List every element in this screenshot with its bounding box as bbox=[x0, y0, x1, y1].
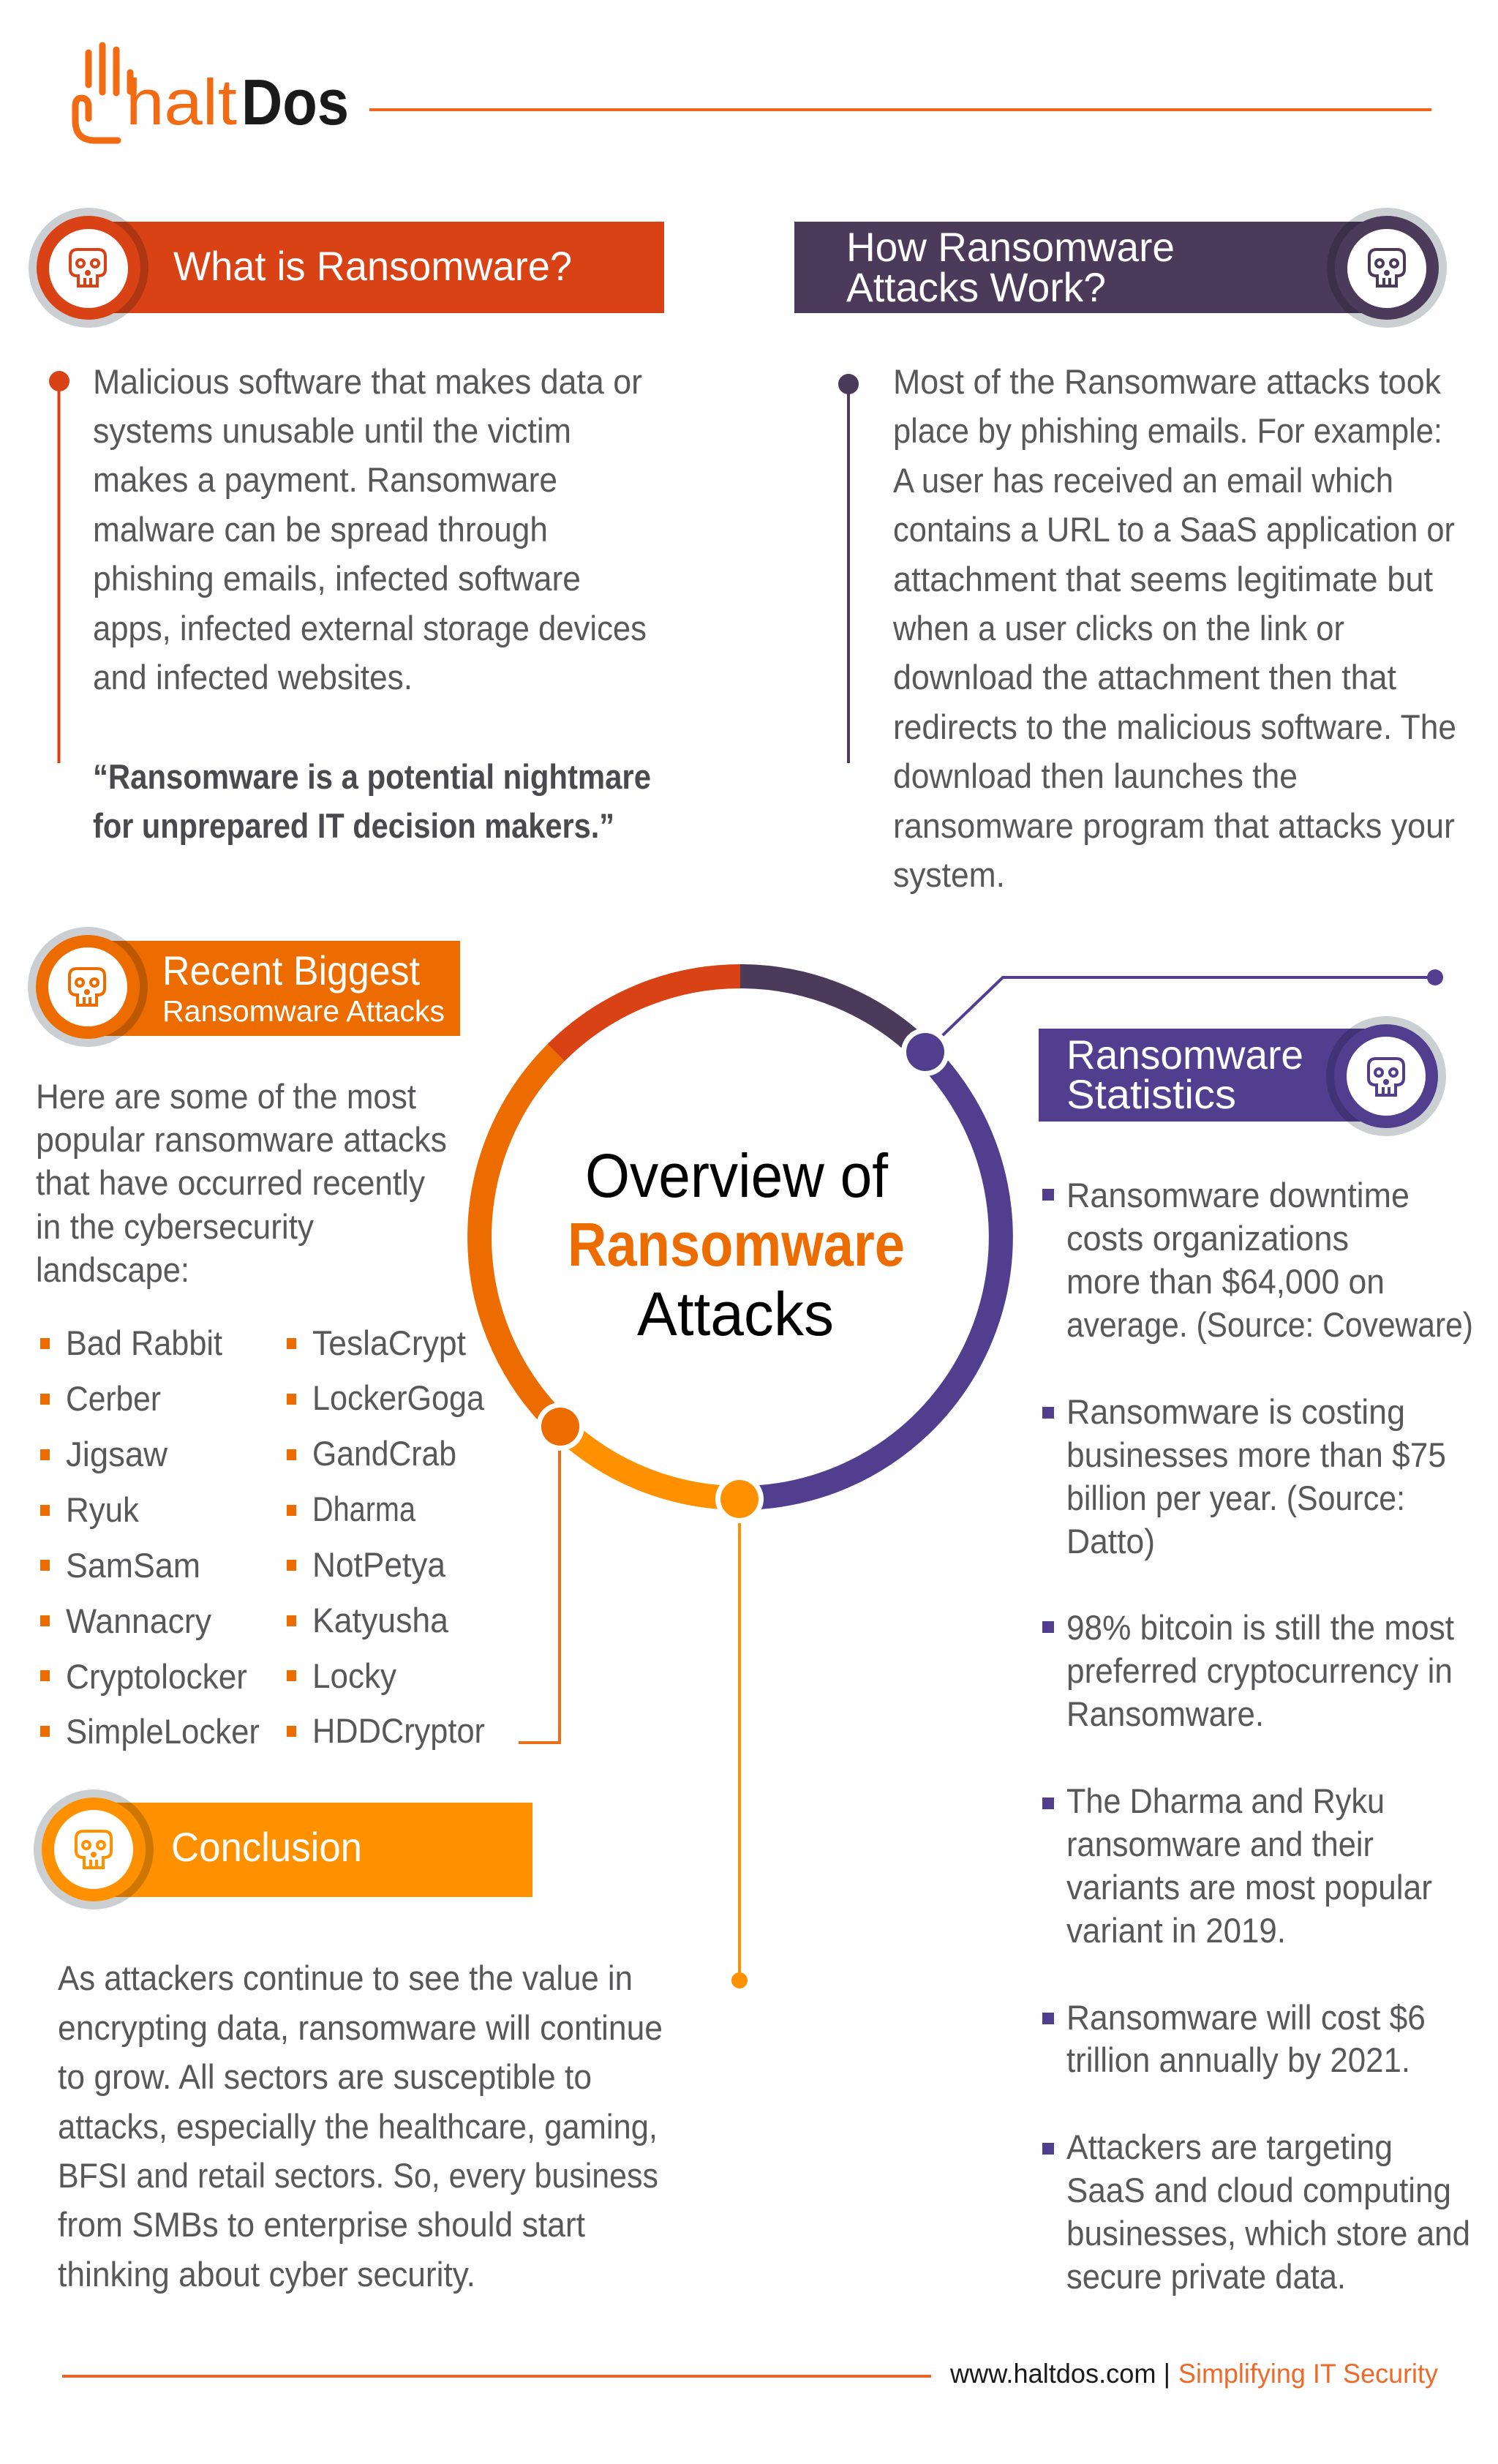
body text: malware can be spread through bbox=[93, 510, 548, 549]
stat: downtime cost bbox=[1066, 1176, 1473, 1344]
ring title: Ransomware bbox=[568, 1210, 905, 1279]
stat: bitcoin: preferred cryptocurrency in bbox=[1066, 1651, 1453, 1690]
icon: skull bbox=[1369, 249, 1404, 286]
list: attacks column 1: SimpleLocker bbox=[66, 1712, 260, 1751]
body text: thinking about cyber security. bbox=[58, 2255, 475, 2294]
stat: popular variants: ransomware and their bbox=[1066, 1825, 1374, 1863]
intro text bbox=[36, 1077, 447, 1289]
body text: BFSI and retail sectors. So, every business bbox=[58, 2156, 658, 2195]
stat: popular variants: variants are most popular bbox=[1066, 1868, 1432, 1907]
stat: yearly cost: billion per year. (Source: bbox=[1066, 1479, 1405, 1517]
list: attacks column 2: Locky bbox=[312, 1656, 396, 1695]
body text: redirects to the malicious software. The bbox=[893, 707, 1456, 746]
list: attacks column 2: Katyusha bbox=[312, 1601, 449, 1639]
timeline marker bbox=[838, 374, 859, 763]
list: attacks column 1: Wannacry bbox=[66, 1601, 211, 1640]
heading bar bbox=[29, 208, 664, 328]
body text: makes a payment. Ransomware bbox=[93, 460, 557, 499]
stat: bitcoin bbox=[1066, 1608, 1454, 1733]
heading bar: Conclusion bbox=[171, 1824, 362, 1870]
stat: annual forecast: trillion annually by 2021. bbox=[1066, 2040, 1410, 2079]
logo: haltDos bbox=[75, 45, 349, 140]
heading bar bbox=[1039, 1016, 1446, 1136]
panel: How Ransomware Attacks Work bbox=[794, 208, 1456, 894]
intro text: Here are some of the most bbox=[36, 1077, 416, 1116]
intro text: landscape: bbox=[36, 1250, 189, 1289]
heading bar: Ransomware bbox=[1066, 1032, 1303, 1078]
stat: SaaS targets: Attackers are targeting bbox=[1066, 2127, 1393, 2166]
heading bar: Recent Biggest bbox=[162, 947, 420, 994]
stat: SaaS targets: SaaS and cloud computing bbox=[1066, 2171, 1451, 2209]
list: attacks column 2: HDDCryptor bbox=[312, 1711, 485, 1750]
stat: SaaS targets bbox=[1066, 2127, 1470, 2296]
stat: bitcoin: 98% bitcoin is still the most bbox=[1066, 1608, 1454, 1647]
icon: skull bbox=[1369, 1059, 1404, 1095]
body text: from SMBs to enterprise should start bbox=[58, 2205, 585, 2244]
body text: A user has received an email which bbox=[893, 461, 1393, 500]
stat: yearly cost bbox=[1066, 1392, 1446, 1560]
body text: attachment that seems legitimate but bbox=[893, 560, 1433, 598]
stat: SaaS targets: businesses, which store and bbox=[1066, 2214, 1470, 2253]
stat: yearly cost: Datto) bbox=[1066, 1522, 1155, 1560]
panel: Recent Biggest Ransomware Attacks bbox=[28, 927, 485, 1751]
body text: phishing emails, infected software bbox=[93, 559, 581, 598]
panel: What is Ransomware bbox=[29, 208, 664, 845]
footer bbox=[949, 2359, 1438, 2389]
chart: overview ring bbox=[480, 969, 1443, 1988]
ring nodes bbox=[536, 1028, 949, 1523]
timeline marker bbox=[49, 371, 69, 763]
stat: downtime cost: more than $64,000 on bbox=[1066, 1262, 1385, 1301]
body text: system. bbox=[893, 855, 1005, 894]
intro text: popular ransomware attacks bbox=[36, 1120, 447, 1159]
icon: hand bbox=[75, 45, 130, 140]
stat: popular variants: variant in 2019. bbox=[1066, 1911, 1286, 1950]
body text: download then launches the bbox=[893, 756, 1298, 795]
heading bar bbox=[34, 1789, 532, 1909]
footer: Simplifying IT Security bbox=[1178, 2359, 1438, 2389]
stat: SaaS targets: secure private data. bbox=[1066, 2257, 1346, 2296]
body text: and infected websites. bbox=[93, 658, 413, 696]
body text bbox=[93, 362, 647, 696]
ring title: Overview of bbox=[585, 1141, 889, 1210]
stat: bitcoin: Ransomware. bbox=[1066, 1694, 1264, 1733]
panel: Ransomware Statistics bbox=[1039, 1016, 1473, 2296]
list: attacks column 2: Dharma bbox=[312, 1490, 416, 1528]
stat: downtime cost: costs organizations bbox=[1066, 1219, 1349, 1258]
wordmark: halt bbox=[126, 66, 237, 138]
stat: popular variants bbox=[1066, 1781, 1432, 1950]
heading bar: Ransomware Attacks bbox=[162, 994, 445, 1028]
list: attacks column 1 bbox=[40, 1323, 260, 1751]
list: attacks column 2 bbox=[287, 1323, 485, 1750]
ring title: Attacks bbox=[637, 1280, 834, 1348]
icon: skull bbox=[76, 1831, 111, 1868]
stat: yearly cost: Ransomware is costing bbox=[1066, 1392, 1405, 1431]
wordmark: Dos bbox=[241, 66, 349, 138]
body text: apps, infected external storage devices bbox=[93, 609, 647, 647]
heading bar: Attacks Work? bbox=[846, 264, 1106, 310]
quote: for unprepared IT decision makers.” bbox=[93, 806, 614, 845]
body text: contains a URL to a SaaS application or bbox=[893, 510, 1455, 549]
stat: popular variants: The Dharma and Ryku bbox=[1066, 1781, 1385, 1820]
list: attacks column 1: SamSam bbox=[66, 1546, 200, 1585]
panel: Conclusion bbox=[34, 1789, 663, 2294]
arrow: orange connector to list bbox=[519, 1427, 560, 1743]
list: attacks column 1: Jigsaw bbox=[66, 1435, 168, 1473]
body text: Most of the Ransomware attacks took bbox=[893, 362, 1441, 401]
ring title bbox=[568, 1141, 905, 1348]
body text: As attackers continue to see the value in bbox=[58, 1958, 633, 1997]
stat: downtime cost: Ransomware downtime bbox=[1066, 1176, 1409, 1214]
list: attacks column 2: TeslaCrypt bbox=[312, 1323, 466, 1362]
body text: ransomware program that attacks your bbox=[893, 806, 1455, 845]
stat: annual forecast bbox=[1066, 1998, 1426, 2079]
list: attacks column 1: Cryptolocker bbox=[66, 1657, 247, 1696]
body text: when a user clicks on the link or bbox=[892, 609, 1344, 647]
quote bbox=[93, 757, 651, 845]
body text: systems unusable until the victim bbox=[93, 411, 571, 450]
body text: Malicious software that makes data or bbox=[93, 362, 642, 401]
list: attacks column 1: Ryuk bbox=[66, 1490, 139, 1529]
heading bar: What is Ransomware? bbox=[173, 243, 572, 289]
heading bar bbox=[794, 208, 1447, 328]
stat: yearly cost: businesses more than $75 bbox=[1066, 1435, 1446, 1474]
body text: download the attachment then that bbox=[893, 658, 1396, 696]
arrow: purple connector bbox=[925, 977, 1435, 1052]
body text: to grow. All sectors are susceptible to bbox=[58, 2057, 592, 2096]
list: attacks column 1: Cerber bbox=[66, 1379, 161, 1418]
list: attacks column 2: LockerGoga bbox=[312, 1378, 485, 1417]
bullet markers bbox=[1042, 1189, 1054, 2155]
icon: skull bbox=[69, 969, 105, 1005]
body text: attacks, especially the healthcare, gaming, bbox=[58, 2107, 658, 2146]
body text: encrypting data, ransomware will continue bbox=[58, 2008, 663, 2047]
heading bar bbox=[28, 927, 460, 1047]
intro text: in the cybersecurity bbox=[36, 1207, 314, 1246]
list: attacks column 1: Bad Rabbit bbox=[66, 1323, 222, 1362]
list: attacks column 2: GandCrab bbox=[312, 1434, 456, 1473]
intro text: that have occurred recently bbox=[36, 1163, 425, 1202]
body text bbox=[58, 1958, 663, 2294]
list: attacks column 2: NotPetya bbox=[312, 1545, 446, 1584]
footer: www.haltdos.com | bbox=[949, 2359, 1170, 2389]
icon: skull bbox=[70, 249, 105, 286]
body text: place by phishing emails. For example: bbox=[893, 411, 1442, 450]
heading bar: How Ransomware bbox=[846, 224, 1175, 270]
body text bbox=[892, 362, 1456, 894]
heading bar: Statistics bbox=[1066, 1071, 1236, 1117]
stat: annual forecast: Ransomware will cost $6 bbox=[1066, 1998, 1426, 2037]
arrow: amber connector to conclusion bbox=[738, 1499, 741, 1980]
quote: “Ransomware is a potential nightmare bbox=[93, 757, 651, 796]
